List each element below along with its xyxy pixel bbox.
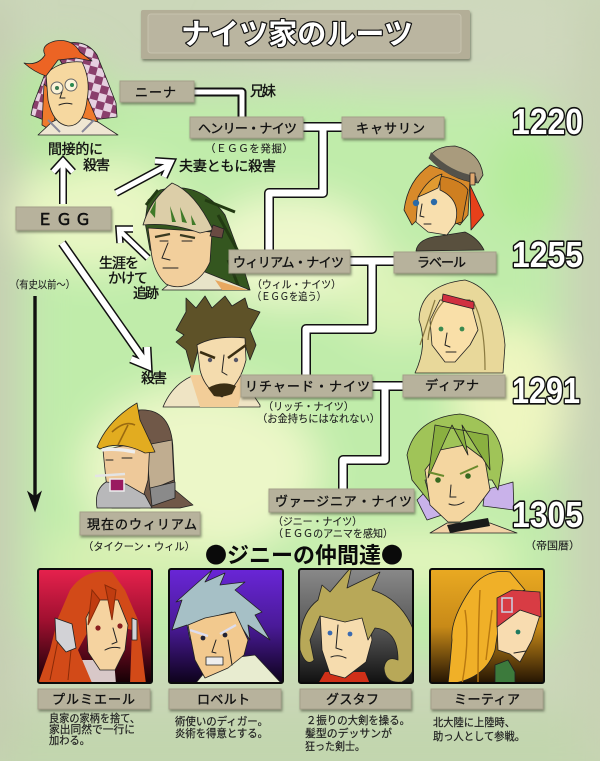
description: 髪型のデッサンが [305,726,392,740]
annotations [10,83,580,553]
name: グスタフ [326,692,379,707]
label: Labelle: ラベール [417,255,466,270]
note: chase line 2: かけて [108,270,148,286]
portrait frame [429,568,546,685]
arrow: EGG to Richard [62,243,148,366]
note: indirectly killed: 間接的に [48,141,103,157]
portrait frame [300,570,412,682]
description: 良家の家柄を捨て、 [49,711,140,725]
description: 加わる。 [49,734,90,747]
note: prehistory: （有史以前〜） [10,278,75,291]
panel: Robert [168,568,284,740]
note: Jinny Knights: （ジニー・ナイツ） [273,516,362,528]
note: siblings: 兄妹 [250,83,276,99]
year labels [512,101,583,535]
year 1255: 1255 [512,234,583,275]
arrow: EGG to Henry couple [116,161,171,193]
label: Henry Knights: ヘンリー・ナイツ [198,121,297,136]
description [305,713,410,753]
note: imperial calendar: （帝国暦） [525,540,580,552]
panel: Gustav [298,566,417,753]
note: chase line 3: 追跡 [133,285,159,301]
label: present William: 現在のウィリアム [87,517,197,532]
note: Tycoon Will: （タイクーン・ウィル） [83,541,195,553]
note: killed: 殺害 [141,370,167,386]
description: 家出同然で一行に [49,722,135,736]
description: ２振りの大剣を操る。 [306,713,410,727]
family tree connector lines [194,92,404,490]
note: senses anima: （ＥＧＧのアニマを感知） [273,527,393,540]
label: EGG: ＥＧＧ [37,212,91,229]
panel: Meteea [429,568,546,743]
label: present William [80,512,200,535]
description [49,711,140,747]
label: William Knights: ウィリアム・ナイツ [233,255,344,270]
year 1220: 1220 [512,101,583,142]
note: killed both spouses: 夫妻ともに殺害 [179,158,276,174]
companions heading: ●ジニーの仲間達● [205,538,403,570]
portrait: Virginia [407,414,517,533]
label: Nina [120,81,194,102]
description [175,714,268,740]
label: Richard Knights [241,375,372,397]
name plate [38,689,150,709]
description: 助っ人として参戦。 [433,729,525,743]
portrait: Labelle [404,146,484,251]
year 1305: 1305 [512,494,583,535]
title text: ナイツ家のルーツ [181,18,413,51]
description [433,715,525,743]
arrow: EGG to Nina portrait [53,161,73,204]
note: Rich Knights: （リッチ・ナイツ） [263,401,354,413]
name: ミーティア [454,692,520,707]
title plate [141,10,470,59]
name: ロベルト [197,692,250,707]
label: Richard Knights: リチャード・ナイツ [245,379,370,394]
portrait: Tycoon Will [95,403,193,508]
note: chases EGG: （ＥＧＧを追う） [252,290,326,303]
name plate [169,689,281,709]
note: indirectly killed line 2: 殺害 [83,157,110,173]
label: EGG [16,207,111,230]
name plate [300,689,411,709]
portrait frame [168,568,284,684]
note: discovered EGG: （ＥＧＧを発掘） [205,142,293,155]
note: cannot be rich: （お金持ちにはなれない） [257,412,380,425]
label: Virginia Knights: ヴァージニア・ナイツ [275,494,412,509]
label: Diana: ディアナ [425,378,479,393]
description: 北大陸に上陸時、 [433,715,515,729]
note: chase: 生涯を [99,255,139,271]
label: Catherine: キャサリン [356,121,425,136]
name plate [431,689,543,709]
portrait: William [143,183,250,290]
year 1291: 1291 [512,370,580,411]
description: 術使いのディガー。 [175,714,268,728]
portrait: Richard [163,296,260,407]
note: Will Knights: （ウィル・ナイツ） [252,279,341,291]
arrow: timeline [28,296,41,511]
label: William Knights [229,250,350,273]
name: プルミエール [52,692,135,707]
label: Catherine [342,117,444,138]
label: Nina: ニーナ [135,85,176,100]
portrait: Diana [415,280,505,373]
description: 狂った剣士。 [305,740,365,753]
label: Henry Knights [190,117,303,138]
portrait: Nina [24,40,118,135]
label: Diana [403,375,505,397]
description: 炎術を得意とする。 [175,726,268,740]
arrow: William chasing EGG [119,229,148,258]
label: Virginia Knights [269,489,414,512]
label: Labelle [394,252,496,273]
portrait frame [39,570,151,682]
panel: Primiera [37,568,153,747]
